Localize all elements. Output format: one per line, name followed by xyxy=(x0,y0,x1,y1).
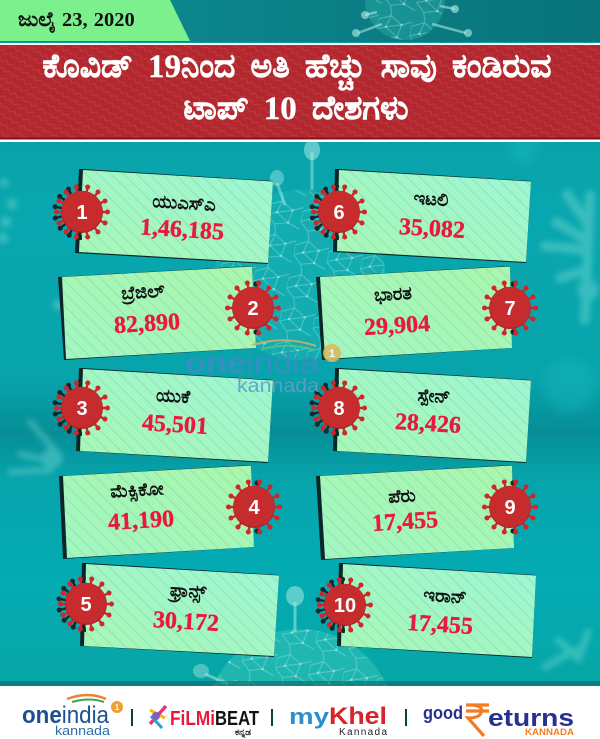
title banner xyxy=(0,43,600,142)
card 10: Iran: ಇರಾನ್ xyxy=(423,585,467,607)
footer xyxy=(0,686,600,739)
watermark: oneindia kannada: kannada xyxy=(237,376,319,397)
card 4: Mexico: ಮೆಕ್ಸಿಕೋ xyxy=(110,478,165,504)
card 6: Italy: ಇಟಲಿ xyxy=(413,188,450,210)
card 9: Peru xyxy=(316,465,536,560)
card 3: UK: 45,501 xyxy=(141,410,209,440)
date tab xyxy=(0,0,190,41)
card 6: Italy xyxy=(307,169,531,263)
card 3: UK: ಯುಕೆ xyxy=(156,385,192,407)
card 5: France: 30,172 xyxy=(152,607,220,637)
card 9: Peru: 9 xyxy=(504,497,516,519)
logo: filmibeat: ಕನ್ನಡ xyxy=(235,727,251,739)
card 8: Spain xyxy=(307,368,531,463)
card 2: Brazil: 2 xyxy=(247,298,259,320)
logo: goodreturns: good xyxy=(423,703,463,723)
logo: mykhel xyxy=(289,703,387,738)
logo: mykhel: my xyxy=(289,704,330,729)
watermark: oneindia kannada xyxy=(185,340,341,397)
logo: filmibeat xyxy=(150,706,259,739)
card 1: USA: 1 xyxy=(76,202,88,224)
card 1: USA: 1,46,185 xyxy=(139,214,225,246)
card 7: India: ಭಾರತ xyxy=(374,283,413,305)
card 1: USA xyxy=(50,169,273,264)
card 8: Spain: 8 xyxy=(333,398,345,420)
card 6: Italy: 6 xyxy=(333,202,345,224)
logo: filmibeat: FiLMi xyxy=(170,708,215,730)
card 1: USA: ಯುಎಸ್ಎ xyxy=(152,191,217,215)
card 2: Brazil xyxy=(58,266,279,360)
card 10: Iran: 10 xyxy=(334,595,356,617)
bottom virus xyxy=(213,629,387,686)
watermark: oneindia kannada: 1 xyxy=(329,348,335,360)
logo: oneindia kannada: 1 xyxy=(115,703,120,712)
logo: oneindia kannada: oneindia xyxy=(22,702,110,729)
card 2: Brazil: ಬ್ರೆಜಿಲ್ xyxy=(120,281,166,305)
card 4: Mexico: 4 xyxy=(248,497,260,519)
card 5: France xyxy=(54,563,279,657)
card 3: UK: 3 xyxy=(76,398,88,420)
logo: filmibeat: BEAT xyxy=(215,708,259,730)
card 6: Italy: 35,082 xyxy=(398,214,466,244)
title banner: ಕೊವಿಡ್ 19ನಿಂದ ಅತಿ ಹೆಚ್ಚು ಸಾವು ಕಂಡಿರುವ xyxy=(43,49,551,91)
card 9: Peru: ಪೆರು xyxy=(388,485,417,507)
card 4: Mexico: 41,190 xyxy=(107,506,175,536)
card 5: France: ಫ್ರಾನ್ಸ್ xyxy=(166,580,208,605)
card 7: India: 7 xyxy=(504,298,516,320)
card 10: Iran xyxy=(313,563,536,658)
watermark: oneindia kannada: oneindia xyxy=(185,345,320,380)
card 4: Mexico xyxy=(59,465,280,559)
logo: goodreturns xyxy=(423,703,575,737)
logo: goodreturns: eturns xyxy=(488,705,574,732)
centre virus xyxy=(215,190,385,360)
card 8: Spain: ಸ್ಪೇನ್ xyxy=(417,385,451,408)
logo: oneindia kannada xyxy=(22,695,123,738)
card 9: Peru: 17,455 xyxy=(371,507,439,537)
logo: oneindia kannada: kannada xyxy=(55,723,111,738)
card 5: France: 5 xyxy=(80,594,92,616)
title banner: ಟಾಪ್ 10 ದೇಶಗಳು xyxy=(183,91,409,127)
card 2: Brazil: 82,890 xyxy=(113,309,181,339)
logo: mykhel: Khel xyxy=(329,703,387,730)
logo: mykhel: Kannada xyxy=(339,727,387,738)
card 7: India: 29,904 xyxy=(363,311,431,341)
card 8: Spain: 28,426 xyxy=(394,409,462,439)
top virus xyxy=(365,0,445,40)
card 7: India xyxy=(316,266,536,360)
logo: goodreturns: KANNADA xyxy=(525,727,575,737)
card 3: UK xyxy=(50,368,273,463)
date tab: ಜುಲೈ 23, 2020 xyxy=(18,9,135,34)
card 10: Iran: 17,455 xyxy=(406,610,474,640)
